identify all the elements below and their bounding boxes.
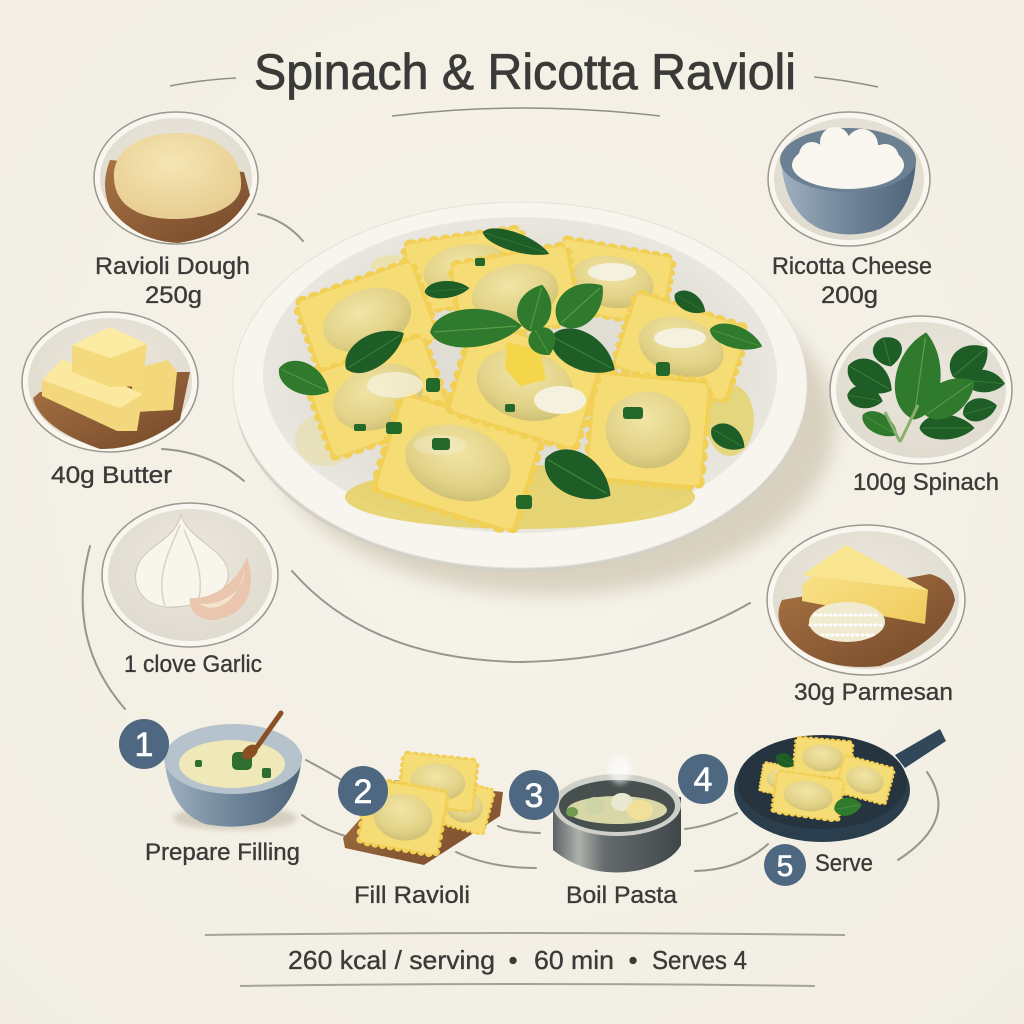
nutrition footer: • [508, 945, 518, 975]
label: ravioli dough: Ravioli Dough [95, 253, 250, 280]
label: Fill Ravioli [354, 882, 470, 909]
badge 3 [509, 770, 559, 820]
basil leaves [273, 223, 766, 513]
step 1: prepare filling [119, 713, 302, 866]
icon: ravioli in pan [760, 738, 894, 820]
nutrition footer [205, 933, 845, 986]
ingredient: ravioli dough [94, 112, 258, 244]
label: ravioli dough: 250g [145, 282, 202, 309]
plate with ravioli [233, 202, 835, 595]
label: Prepare Filling [145, 839, 300, 866]
label: Serve [815, 850, 873, 877]
icon: spinach leaves [841, 329, 1006, 443]
butter sauce [295, 255, 754, 529]
icon: wooden board [778, 574, 955, 667]
label: Boil Pasta [566, 882, 678, 909]
ravioli pile [297, 228, 747, 530]
ingredient: butter [22, 312, 198, 452]
label: spinach: 100g Spinach [853, 469, 999, 496]
parmesan sprinkles [367, 263, 706, 455]
step 4: pan [678, 729, 946, 842]
icon: garlic clove [190, 557, 251, 620]
icon: pasta in pot [566, 793, 667, 824]
ingredient: parmesan [767, 525, 965, 675]
icon: cheese wedge [802, 545, 928, 624]
icon: cutting board [343, 780, 503, 865]
plate rim [234, 212, 806, 572]
icon: filling bowl [164, 755, 302, 827]
icon: dough ball [114, 133, 241, 219]
icon: ricotta [792, 127, 904, 189]
badge 4: 4 [694, 761, 712, 799]
label: garlic: 1 clove Garlic [124, 651, 262, 678]
steam [609, 756, 631, 784]
label: butter: 40g Butter [51, 462, 172, 489]
plate well [263, 217, 777, 533]
nutrition footer: Serves 4 [652, 945, 747, 975]
ingredient: ricotta cheese [768, 112, 930, 246]
badge 1: 1 [135, 726, 153, 764]
icon: frying pan [734, 738, 910, 842]
herb flecks [354, 258, 670, 509]
connector curves [83, 214, 938, 871]
badge 3: 3 [525, 777, 543, 815]
icon: garlic bulb [136, 514, 228, 607]
badge 4 [678, 754, 728, 804]
badge 2 [338, 766, 388, 816]
label: ravioli dough [95, 253, 250, 309]
butter pat [505, 342, 546, 386]
icon: ravioli [359, 754, 494, 854]
label: ricotta cheese: 200g [821, 282, 878, 309]
icon: wooden spoon [257, 713, 281, 747]
nutrition footer: 60 min [534, 945, 614, 975]
ingredient: spinach [830, 316, 1012, 464]
icon: pot [553, 797, 681, 872]
icon: wooden board [105, 160, 250, 243]
label: ricotta cheese: Ricotta Cheese [772, 253, 932, 280]
icon: butter blocks [42, 327, 177, 431]
nutrition footer: 260 kcal / serving [288, 945, 495, 975]
icon: pan handle [895, 729, 946, 768]
ingredient: garlic [102, 503, 278, 647]
icon: basil garnish [773, 750, 863, 818]
badge 2: 2 [354, 773, 372, 811]
label: parmesan: 30g Parmesan [794, 679, 953, 706]
icon: wooden board [33, 372, 190, 449]
label: ricotta cheese [772, 253, 932, 309]
badge 5: 5 [777, 850, 793, 883]
title: Spinach & Ricotta Ravioli [254, 44, 796, 100]
icon: blue bowl [781, 158, 916, 234]
step 3: boil pasta [509, 756, 681, 909]
icon: grated cheese [809, 602, 885, 642]
step 5: serve [764, 844, 873, 886]
plate shadow [265, 255, 835, 595]
step 2: fill ravioli [338, 754, 503, 909]
badge 1 [119, 719, 169, 769]
title [170, 44, 878, 116]
nutrition footer: • [628, 945, 638, 975]
